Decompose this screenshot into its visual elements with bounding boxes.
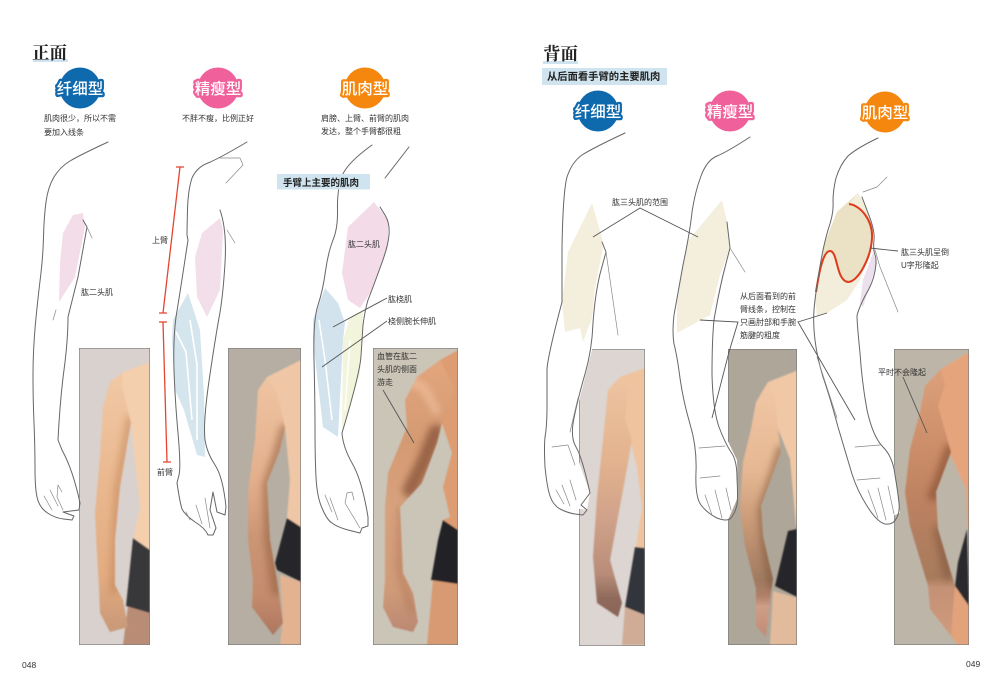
arm drawing: back slim (544, 133, 625, 515)
label: biceps on slim arm: 肱二头肌 (81, 287, 113, 297)
photo: back muscular arm (894, 349, 969, 645)
callout: triceps inverted U (870, 247, 949, 270)
arm drawing: back lean (672, 137, 750, 522)
arm drawing: back muscular (813, 138, 900, 524)
callout: triceps inverted U: 肱三头肌呈倒 (901, 248, 949, 257)
bar: upper arm length: 上臂 (152, 235, 168, 245)
callout: forearm lines from behind: 只画肘部和手腕 (740, 317, 796, 327)
arm drawing: front slim (33, 142, 108, 520)
heading: back view: 背面 (543, 44, 578, 64)
callout: vein on biceps side (377, 351, 417, 443)
badge: front lean (195, 68, 241, 108)
callout: forearm lines from behind: 筋腱的粗度 (740, 330, 780, 340)
arm drawing: front lean (172, 142, 247, 535)
photo: front slim arm (79, 348, 150, 645)
text: muscular description: 发达，整个手臂都很粗 (321, 126, 401, 136)
callout: vein on biceps side: 游走 (377, 377, 393, 387)
badge: back muscular (862, 92, 908, 132)
badge: back muscular: 肌肉型 (862, 104, 908, 122)
callout: forearm lines from behind (700, 291, 855, 420)
badge: front slim: 纤细型 (57, 80, 103, 98)
badge: front muscular (342, 68, 388, 108)
label: extensor carpi radialis longus with leader: 桡侧腕长伸肌 (388, 316, 436, 326)
badge: back slim: 纤细型 (575, 103, 621, 121)
callout: triceps range (593, 197, 698, 237)
callout: triceps range: 肱三头肌的范围 (612, 197, 668, 207)
badge: front slim (57, 68, 103, 108)
badge: front muscular: 肌肉型 (342, 80, 388, 98)
text: muscular description: 肩膀、上臂、前臂的肌肉 (321, 114, 409, 123)
bar: forearm length: 前臂 (157, 467, 173, 477)
label box: main muscles of the arm (277, 174, 370, 190)
text: slim description: 要加入线条 (44, 127, 84, 137)
label box: main muscles seen from behind: 从后面看手臂的主要肌肉 (547, 70, 660, 83)
bar: upper arm length (151, 167, 184, 313)
label: extensor carpi radialis longus with leader (322, 316, 436, 367)
callout: forearm lines from behind: 臂线条，控制在 (740, 304, 796, 314)
callout: forearm lines from behind: 从后面看到的前 (740, 292, 796, 301)
callout: triceps inverted U: U字形隆起 (901, 260, 939, 270)
label: brachioradialis with leader: 肱桡肌 (388, 294, 412, 304)
photo: front lean arm (228, 348, 301, 645)
badge: back lean: 精瘦型 (707, 102, 753, 121)
badge: back slim (575, 90, 621, 132)
badge: front lean: 精瘦型 (195, 79, 241, 98)
text: lean description: 不胖不瘦，比例正好 (182, 113, 254, 123)
label box: main muscles seen from behind (542, 68, 667, 85)
heading: front view: 正面 (32, 43, 67, 63)
arm drawing: front muscular (313, 145, 409, 533)
photo: back lean arm (728, 349, 797, 645)
label box: main muscles of the arm: 手臂上主要的肌肉 (283, 177, 359, 189)
page number right: 049 (966, 659, 980, 669)
callout: not normally raised: 平时不会隆起 (878, 367, 926, 377)
page number left: 048 (22, 660, 36, 670)
badge: back lean (707, 90, 753, 132)
bar: forearm length (157, 322, 173, 477)
callout: vein on biceps side: 血管在肱二 (377, 352, 417, 361)
photo: front muscular arm (373, 348, 458, 645)
photo: back slim arm (579, 349, 645, 646)
label: brachioradialis with leader (333, 294, 412, 327)
callout: not normally raised (878, 367, 927, 433)
label: biceps on muscular arm: 肱二头肌 (348, 239, 380, 249)
callout: vein on biceps side: 头肌的侧面 (377, 364, 417, 374)
text: slim description: 肌肉很少，所以不需 (44, 114, 116, 123)
